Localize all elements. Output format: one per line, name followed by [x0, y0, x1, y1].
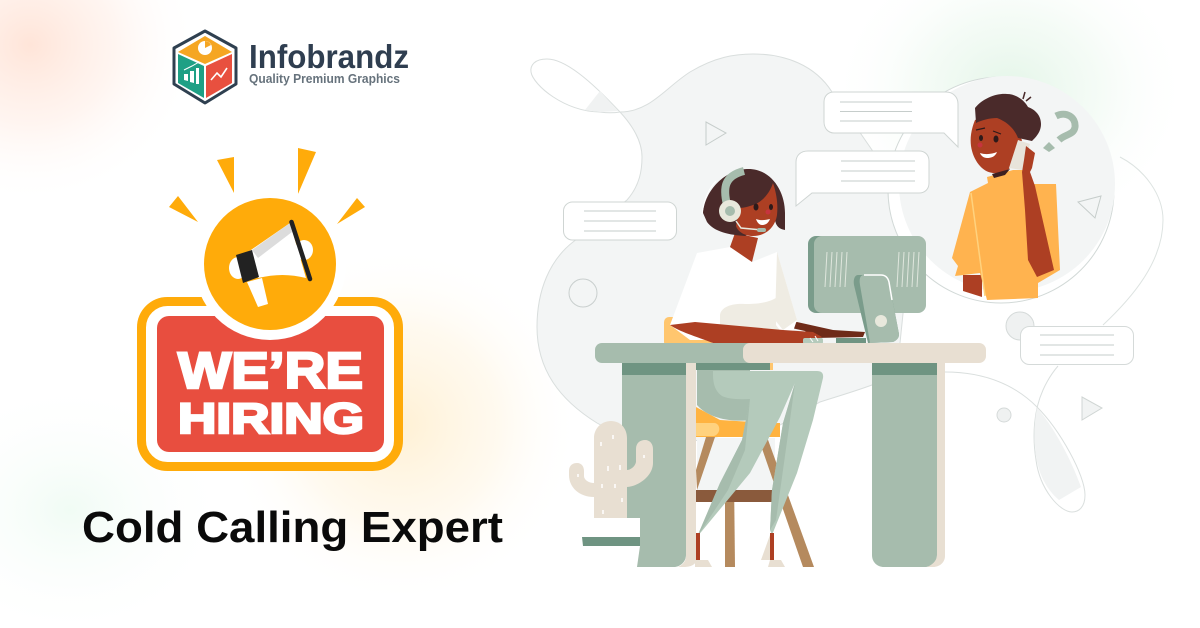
cactus in pot — [569, 421, 653, 546]
desk — [595, 343, 986, 567]
triangle right — [1078, 196, 1101, 218]
chair seat and legs — [696, 407, 814, 567]
logo wordmark: Infobrandz — [249, 38, 409, 75]
sign text: WE'RE: WE’RE — [178, 342, 363, 399]
woman's back arm — [778, 322, 865, 338]
woman's trousers — [697, 370, 823, 537]
chair back — [664, 317, 776, 347]
desk top beige — [743, 343, 986, 363]
man's hand and arm — [1022, 146, 1054, 277]
shoes — [695, 533, 785, 567]
loop outline — [531, 59, 620, 113]
lower right curve — [945, 366, 1085, 512]
man on phone — [952, 92, 1075, 300]
icon: megaphone — [229, 222, 313, 307]
woman's neck — [730, 233, 758, 262]
badge: we're hiring — [142, 148, 398, 466]
speech bubble: right — [1020, 326, 1134, 364]
desk right side panel — [927, 363, 945, 567]
woman at desk — [670, 169, 865, 343]
man's hair — [975, 94, 1041, 141]
speech bubble: top — [824, 92, 958, 147]
computer monitor — [808, 236, 926, 344]
desk right leg — [872, 363, 937, 567]
circle behind man — [888, 77, 1114, 303]
woman's shirt — [670, 247, 797, 340]
decorative circle left — [569, 279, 597, 307]
man's face — [971, 112, 1022, 173]
megaphone circle — [204, 198, 336, 330]
desk left side panel — [678, 363, 696, 567]
decorative circle right — [1006, 312, 1034, 340]
monitor base — [836, 338, 866, 344]
triangle lower — [1082, 397, 1102, 420]
monitor vents — [825, 252, 919, 287]
sign text: HIRING: HIRING — [178, 395, 364, 443]
question mark — [1043, 114, 1075, 152]
man's lower arm — [963, 275, 982, 297]
phone — [1009, 140, 1030, 170]
desk top green — [595, 343, 765, 363]
right curve — [1103, 157, 1163, 325]
decorative dot — [997, 408, 1011, 422]
keyboard and hand — [803, 336, 823, 344]
woman's hair — [703, 169, 785, 236]
woman's belly shade — [720, 297, 782, 340]
logo: Infobrandz — [174, 31, 409, 103]
speech bubble: middle — [796, 151, 929, 206]
woman's face — [736, 183, 777, 236]
speech bubble: left — [564, 202, 676, 240]
icon: hexagonal cube — [174, 31, 236, 103]
logo tagline: Quality Premium Graphics — [249, 72, 400, 86]
megaphone rays — [169, 148, 365, 224]
job title: Cold Calling Expert — [82, 503, 503, 552]
man's features — [976, 128, 1001, 158]
monitor stand — [854, 275, 899, 343]
red sign panel — [157, 316, 384, 452]
woman's front arm — [670, 322, 822, 343]
man's shirt — [952, 170, 1060, 300]
cactus body — [594, 421, 653, 518]
illustration: background shapes — [531, 54, 1163, 512]
triangle left — [706, 122, 726, 145]
icon: headset — [719, 171, 766, 232]
background blob — [537, 54, 908, 443]
badge frame — [142, 302, 398, 466]
desk left leg — [622, 363, 686, 567]
cactus pot — [582, 518, 640, 537]
woman's features — [754, 204, 773, 225]
